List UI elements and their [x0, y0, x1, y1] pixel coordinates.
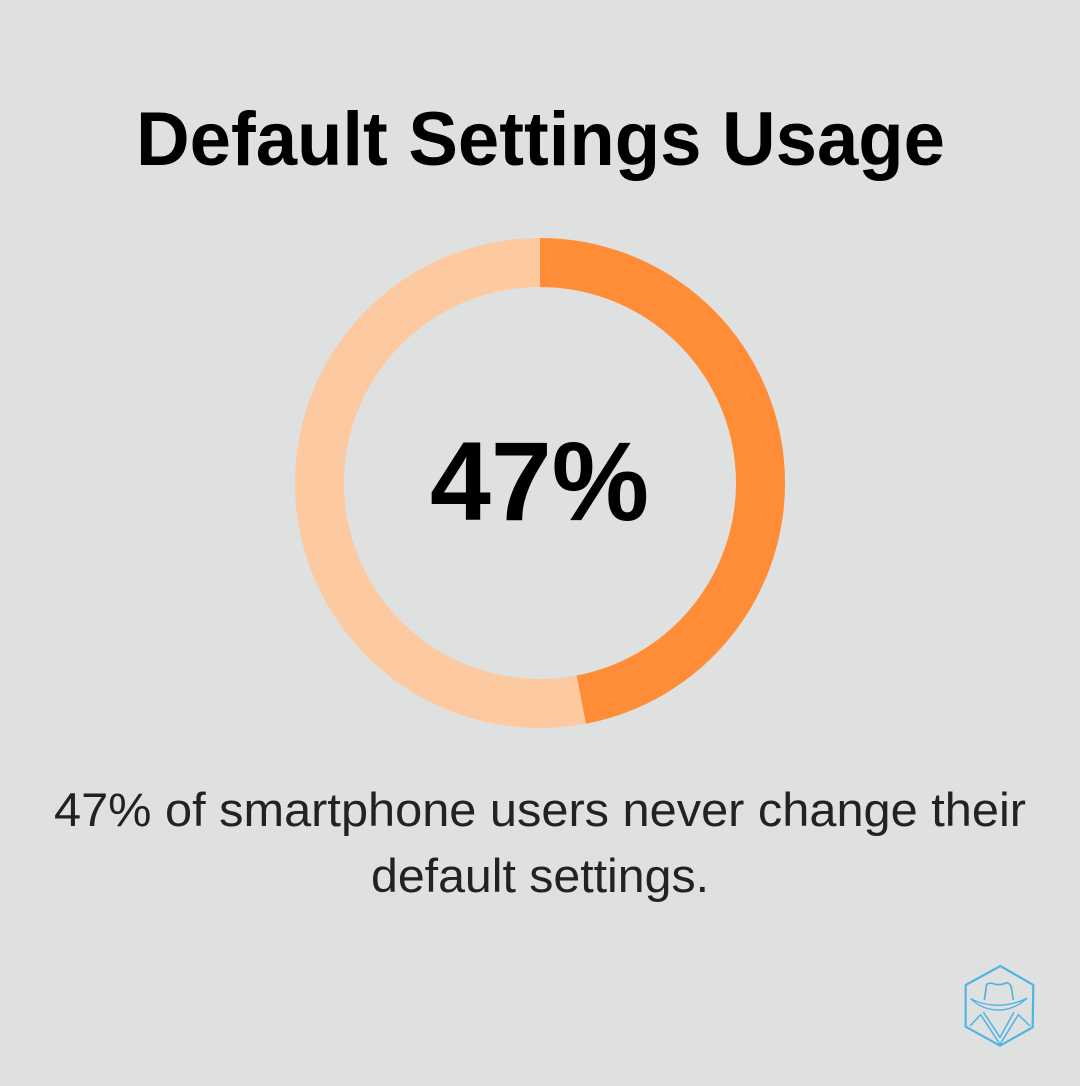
- hat: [984, 983, 1013, 1000]
- description text: default settings.: [371, 849, 709, 902]
- donut segment: 47%: [540, 262, 761, 700]
- donut track: remaining 53%: [320, 262, 760, 704]
- hat brim: [971, 998, 1027, 1010]
- description text: 47% of smartphone users never change their: [54, 783, 1026, 836]
- collar and shoulders: [970, 1012, 1030, 1044]
- donut chart: 47%: [320, 262, 761, 704]
- title: Default Settings Usage: [136, 97, 945, 182]
- description text: [54, 783, 1026, 902]
- icon: spy logo in hexagon: [966, 966, 1033, 1046]
- hexagon outline: [966, 966, 1033, 1046]
- center value: 47%: [430, 419, 649, 544]
